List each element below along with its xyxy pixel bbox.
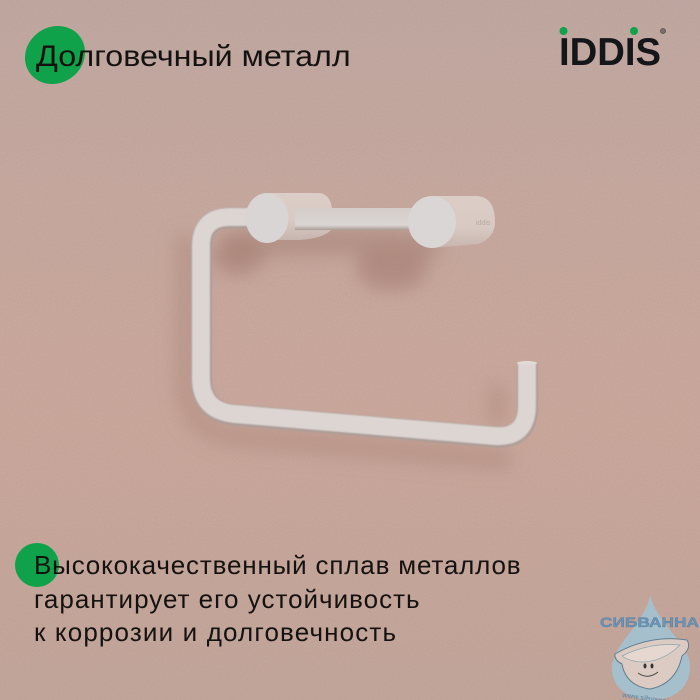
heading: Долговечный металл xyxy=(36,40,351,73)
holder rod xyxy=(202,218,528,437)
tub smile xyxy=(638,672,658,676)
green blob behind description xyxy=(15,543,59,587)
horizontal bar xyxy=(295,208,415,230)
right mount face xyxy=(408,196,456,248)
bathtub xyxy=(615,639,689,689)
toilet paper holder xyxy=(201,193,537,437)
description text: Высококачественный сплав металлов xyxy=(34,550,521,580)
right mount logo: iddis xyxy=(476,220,491,227)
brand name: СИБВАННА xyxy=(600,615,699,630)
tub inner rim xyxy=(622,644,680,662)
water drop xyxy=(612,595,690,700)
logo dots xyxy=(560,27,568,35)
right mount cylinder xyxy=(432,196,495,248)
tub eyes xyxy=(644,664,654,668)
description text: к коррозии и долговечность xyxy=(34,617,397,647)
green blob behind heading xyxy=(14,14,96,96)
description text xyxy=(34,550,521,647)
watermark: Sibvanna logo xyxy=(600,595,699,700)
registered mark xyxy=(660,28,666,34)
holder shadow on the wall xyxy=(186,235,510,460)
description text: гарантирует его устойчивость xyxy=(34,584,421,614)
left mount face xyxy=(246,193,288,243)
left mount cylinder xyxy=(267,193,332,240)
brand logo: IDDIS: IDDIS xyxy=(559,31,661,74)
